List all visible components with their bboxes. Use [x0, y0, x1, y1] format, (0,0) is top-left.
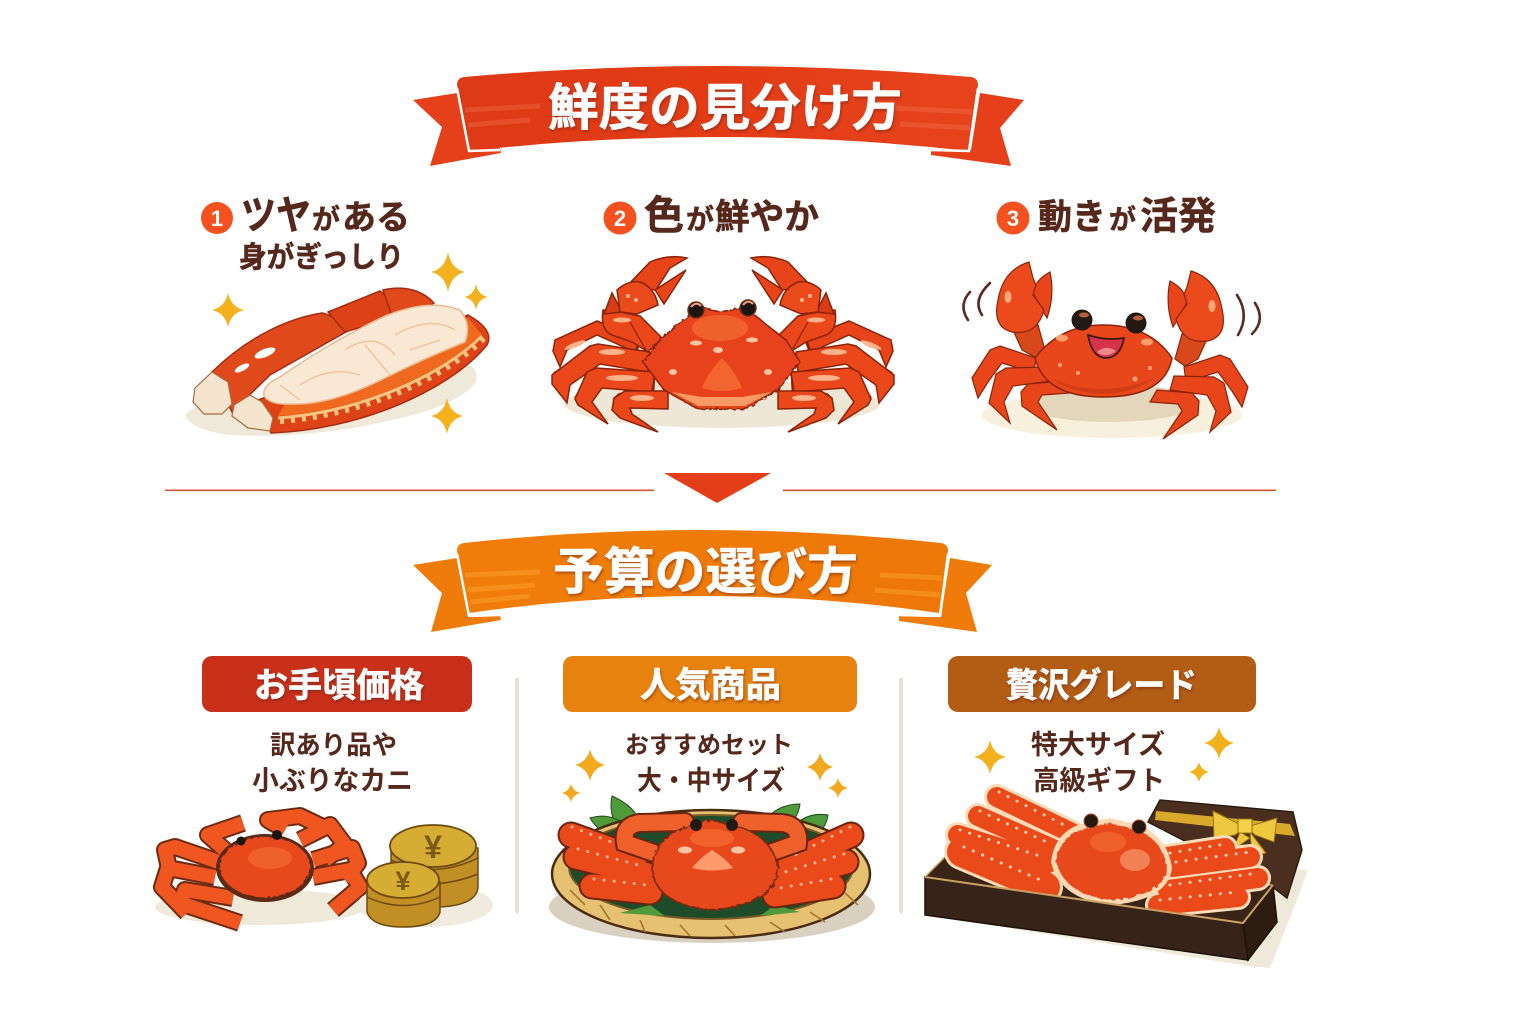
- point 1 heading: ある: [342, 199, 410, 237]
- motion lines: [963, 283, 1260, 335]
- point 2 heading: 鮮やか: [715, 198, 819, 237]
- point 1 heading: 1: [211, 206, 223, 231]
- point 3 heading: 活発: [1140, 196, 1216, 238]
- icon: yen coins: ¥: [424, 829, 442, 865]
- sparkles: freshness: [212, 252, 488, 434]
- point 2 heading: が: [686, 203, 714, 235]
- point 2 heading: 2: [614, 206, 626, 231]
- budget tier 2 description: [625, 732, 793, 796]
- budget tier 2 label: [563, 656, 857, 712]
- point 2 heading: [604, 194, 819, 238]
- budget tier 3 description: [1031, 729, 1165, 796]
- title banner: freshness: 鮮度の見分け方: [548, 80, 902, 136]
- budget tier 1 description: 訳あり品や: [270, 730, 397, 760]
- budget tier 2 description: 大・中サイズ: [637, 765, 785, 796]
- point 1 heading: が: [312, 203, 340, 235]
- sparkles: popular: [562, 749, 848, 802]
- point 1 heading: [201, 194, 410, 274]
- point 1 heading: ツヤ: [241, 194, 311, 238]
- sparkles: luxury: [974, 727, 1234, 782]
- budget tier 2 label: 人気商品: [640, 666, 781, 705]
- illustration: crab legs with meat: [185, 288, 489, 436]
- illustration: vivid crab: [552, 257, 894, 432]
- icon: yen coins: ¥: [395, 866, 411, 896]
- illustration: small crab: [155, 816, 365, 925]
- budget tier 2 description: おすすめセット: [625, 732, 793, 759]
- budget tier 1 label: [202, 656, 472, 712]
- illustration: luxury crab gift box: [925, 792, 1308, 968]
- budget tier 3 label: 贅沢グレード: [1006, 667, 1197, 705]
- illustration: lively crab: [972, 262, 1248, 439]
- budget tier 3 label: [948, 656, 1256, 712]
- budget tier 1 description: 小ぶりなカニ: [252, 766, 413, 796]
- title banner: freshness: [413, 66, 1024, 166]
- point 3 heading: [996, 196, 1216, 238]
- budget tier 1 description: [252, 730, 413, 796]
- icon: yen coins: [357, 825, 493, 927]
- title banner: budget: [413, 530, 992, 632]
- illustration: crab on basket: [549, 796, 875, 943]
- point 3 heading: 3: [1007, 206, 1019, 231]
- title banner: budget: 予算の選び方: [553, 544, 858, 600]
- budget tier 1 label: お手頃価格: [254, 667, 424, 705]
- point 3 heading: が: [1109, 204, 1136, 235]
- point 1 heading: 身がぎっしり: [239, 240, 404, 274]
- budget tier 3 description: 特大サイズ: [1031, 729, 1165, 760]
- column dividers: [515, 678, 903, 913]
- budget tier 3 description: 高級ギフト: [1033, 766, 1165, 796]
- point 2 heading: 色: [644, 194, 684, 238]
- divider with arrow: [165, 473, 1276, 503]
- point 3 heading: 動き: [1038, 198, 1106, 237]
